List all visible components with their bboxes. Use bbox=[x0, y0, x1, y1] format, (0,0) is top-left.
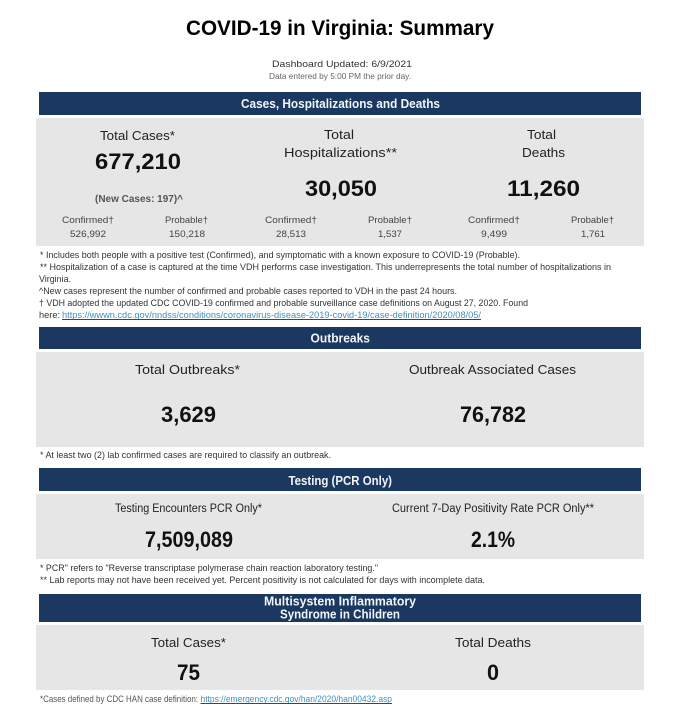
stat: total outbreaks: 3,629 bbox=[161, 402, 216, 427]
footnote: MIS-C case definition bbox=[40, 694, 392, 705]
footnotes: testing: ** Lab reports may not have been received yet. Percent positivity is not calculated for days with incomplete data. bbox=[40, 575, 485, 586]
stat: total cases: 677,210 bbox=[95, 149, 181, 174]
footnotes: cases section: here: bbox=[39, 310, 60, 321]
footnotes: cases section: * Includes both people with a positive test (Confirmed), and symptomatic with a known exposure to COVID-19 (Probable). bbox=[40, 250, 520, 261]
breakdown: deaths confirmed and probable: 9,499 bbox=[481, 229, 507, 240]
dashboard update date bbox=[269, 59, 412, 81]
stat: total hospitalizations bbox=[284, 127, 397, 201]
header bar: multisystem inflammatory syndrome in children: Syndrome in Children bbox=[280, 608, 400, 622]
panel: multisystem inflammatory syndrome in children bbox=[36, 625, 644, 690]
stat: MIS-C total cases bbox=[151, 635, 226, 685]
header bar: outbreaks bbox=[39, 327, 641, 349]
breakdown: cases confirmed and probable: 526,992 bbox=[70, 229, 106, 240]
footnote: MIS-C case definition: *Cases defined by CDC HAN case definition: bbox=[40, 694, 198, 705]
stat: total deaths bbox=[507, 127, 580, 201]
footnotes: cases section: https://wwwn.cdc.gov/nndss/conditions/coronavirus-disease-2019-covid-19/case-definition/2020/08/05/ bbox=[62, 310, 481, 321]
dashboard update date: Dashboard Updated: 6/9/2021 bbox=[272, 59, 412, 70]
stat: total outbreaks: Total Outbreaks* bbox=[135, 362, 240, 377]
breakdown: deaths confirmed and probable: 1,761 bbox=[581, 229, 605, 240]
footnote: outbreaks: * At least two (2) lab confirmed cases are required to classify an outbreak. bbox=[40, 450, 331, 461]
stat: total cases: Total Cases* bbox=[100, 128, 175, 143]
breakdown: hospitalizations confirmed and probable bbox=[265, 215, 412, 240]
panel: outbreaks bbox=[36, 352, 644, 447]
stat: total cases bbox=[95, 128, 183, 205]
breakdown: deaths confirmed and probable: Probable† bbox=[571, 215, 614, 226]
stat: outbreak associated cases bbox=[409, 362, 577, 427]
breakdown: hospitalizations confirmed and probable: 1,537 bbox=[378, 229, 402, 240]
header bar: multisystem inflammatory syndrome in children bbox=[39, 594, 641, 622]
stat: MIS-C total deaths: Total Deaths bbox=[455, 635, 532, 650]
header bar: outbreaks: Outbreaks bbox=[310, 332, 370, 346]
breakdown: cases confirmed and probable: 150,218 bbox=[169, 229, 205, 240]
stat: total deaths: Total bbox=[527, 127, 556, 142]
header bar: testing: Testing (PCR Only) bbox=[288, 474, 392, 488]
stat: MIS-C total cases: Total Cases* bbox=[151, 635, 226, 650]
panel: cases, hospitalizations and deaths bbox=[36, 118, 644, 246]
header bar: testing bbox=[39, 468, 641, 491]
stat: MIS-C total deaths bbox=[455, 635, 532, 685]
footnotes: cases section: ** Hospitalization of a case is captured at the time VDH performs case investigation. This underrepresents the total number of hospitalizations in bbox=[40, 262, 611, 273]
breakdown: hospitalizations confirmed and probable: Confirmed† bbox=[265, 215, 317, 226]
footnote: MIS-C case definition: https://emergency.cdc.gov/han/2020/han00432.asp bbox=[200, 694, 392, 705]
stat: total hospitalizations: Hospitalizations** bbox=[284, 145, 397, 160]
stat: outbreak associated cases: Outbreak Associated Cases bbox=[409, 362, 577, 377]
panel: testing bbox=[36, 494, 644, 559]
footnotes: cases section: Virginia. bbox=[39, 274, 71, 285]
breakdown: hospitalizations confirmed and probable: Probable† bbox=[368, 215, 412, 226]
breakdown: cases confirmed and probable: Confirmed† bbox=[62, 215, 114, 226]
stat: positivity rate bbox=[392, 503, 594, 552]
footnotes: cases section: † VDH adopted the updated CDC COVID-19 confirmed and probable surveillance case definitions on August 27, 2020. Found bbox=[39, 298, 528, 309]
stat: total hospitalizations: Total bbox=[324, 127, 354, 142]
footnotes: testing bbox=[40, 563, 485, 586]
breakdown: cases confirmed and probable bbox=[62, 215, 208, 240]
breakdown: deaths confirmed and probable bbox=[468, 215, 614, 240]
stat: total outbreaks bbox=[135, 362, 240, 427]
header bar: cases, hospitalizations and deaths: Cases, Hospitalizations and Deaths bbox=[241, 97, 440, 111]
stat: MIS-C total deaths: 0 bbox=[487, 660, 499, 685]
stat: testing encounters bbox=[115, 503, 262, 552]
footnotes: cases section bbox=[39, 250, 611, 321]
stat: MIS-C total cases: 75 bbox=[177, 660, 200, 685]
stat: testing encounters: Testing Encounters PCR Only* bbox=[115, 503, 262, 515]
breakdown: deaths confirmed and probable: Confirmed† bbox=[468, 215, 520, 226]
stat: total deaths: 11,260 bbox=[507, 176, 580, 201]
breakdown: hospitalizations confirmed and probable: 28,513 bbox=[276, 229, 306, 240]
dashboard update date: Data entered by 5:00 PM the prior day. bbox=[269, 72, 411, 81]
footnotes: cases section: ^New cases represent the number of confirmed and probable cases reported to VDH in the past 24 hours. bbox=[39, 286, 457, 297]
stat: positivity rate: Current 7-Day Positivity Rate PCR Only** bbox=[392, 503, 594, 515]
footnotes: testing: * PCR" refers to "Reverse transcriptase polymerase chain reaction laboratory testing." bbox=[40, 563, 378, 574]
breakdown: cases confirmed and probable: Probable† bbox=[165, 215, 208, 226]
stat: positivity rate: 2.1% bbox=[471, 527, 515, 552]
stat: total cases: (New Cases: 197)^ bbox=[95, 194, 183, 205]
stat: total hospitalizations: 30,050 bbox=[305, 176, 377, 201]
header bar: cases, hospitalizations and deaths bbox=[39, 92, 641, 115]
stat: outbreak associated cases: 76,782 bbox=[460, 402, 526, 427]
header bar: multisystem inflammatory syndrome in children: Multisystem Inflammatory bbox=[264, 594, 416, 608]
stat: total deaths: Deaths bbox=[522, 145, 566, 160]
title: COVID-19 in Virginia: Summary bbox=[186, 17, 494, 40]
stat: testing encounters: 7,509,089 bbox=[145, 527, 233, 552]
